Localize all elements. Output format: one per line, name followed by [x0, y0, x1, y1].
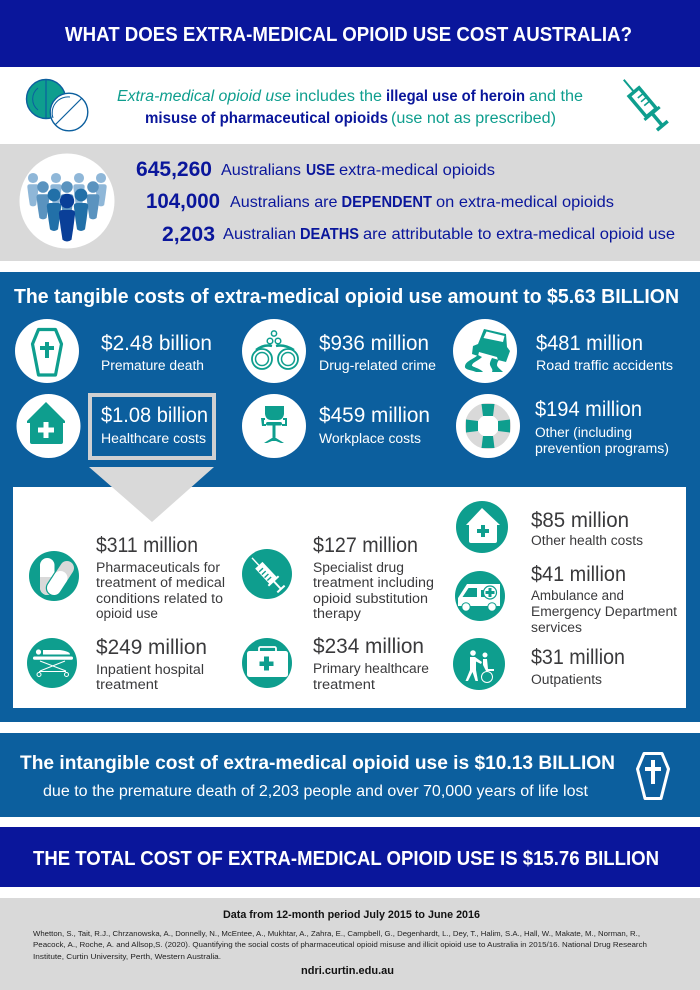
item: pharmaceuticals: opioid use — [96, 606, 158, 621]
citation — [33, 929, 647, 961]
item: primary healthcare: Primary healthcare — [313, 661, 429, 676]
definition text: illegal use of heroin — [386, 88, 525, 105]
item: drug-related crime: Drug-related crime — [319, 358, 436, 373]
stat: users: 645,260 — [136, 158, 212, 181]
website: ndri.curtin.edu.au — [301, 965, 394, 977]
definition text: (use not as prescribed) — [391, 110, 556, 127]
stat: dependent: 104,000 — [146, 190, 220, 213]
item: outpatients — [453, 638, 625, 690]
item: outpatients: $31 million — [531, 646, 625, 669]
item: workplace costs: Workplace costs — [319, 431, 421, 446]
item: inpatient hospital treatment: $249 million — [96, 636, 207, 659]
stat: dependent — [146, 190, 614, 213]
arrow: healthcare to breakdown — [89, 467, 214, 522]
item: premature death — [15, 319, 212, 383]
item: specialist drug treatment: treatment including — [313, 575, 434, 590]
icon: group of people — [20, 154, 114, 248]
item: other health costs — [456, 501, 643, 553]
item: inpatient hospital treatment: Inpatient hospital — [96, 662, 204, 677]
item: ambulance and emergency: Emergency Department — [531, 604, 677, 619]
stat: users: extra-medical opioids — [339, 162, 495, 179]
stat: users: USE — [306, 162, 335, 179]
item: pharmaceuticals: $311 million — [96, 534, 198, 557]
item: road traffic accidents: $481 million — [536, 332, 643, 355]
definition panel — [0, 67, 700, 144]
item: ambulance and emergency: services — [531, 620, 582, 635]
icon: syringe — [616, 73, 670, 132]
item: other health costs: $85 million — [531, 509, 629, 532]
item: pharmaceuticals: conditions related to — [96, 591, 223, 606]
footer: sources — [0, 898, 700, 990]
panel: tangible costs — [0, 272, 700, 722]
item: other costs: Other (including — [535, 425, 632, 440]
item: healthcare costs: $1.08 billion — [101, 404, 208, 427]
item: road traffic accidents — [453, 319, 673, 383]
panel: intangible cost — [0, 733, 700, 817]
item: inpatient hospital treatment — [27, 636, 207, 692]
item: other costs: prevention programs) — [535, 441, 669, 456]
item: specialist drug treatment: opioid substitution — [313, 591, 428, 606]
data period: Data from 12-month period July 2015 to June 2016 — [223, 909, 480, 921]
definition text: and the — [529, 88, 583, 105]
definition text: Extra-medical opioid use — [117, 88, 291, 105]
item: healthcare costs — [16, 394, 214, 458]
stat: users: Australians — [221, 162, 301, 179]
panel: intangible cost: The intangible cost of extra-medical opioid use is $10.13 BILLION — [20, 752, 615, 774]
stat: deaths — [162, 223, 675, 246]
title banner — [0, 0, 700, 67]
citation: Peacock, A., Roche, A. and Allsop,S. (2020). Quantifying the social costs of pharmaceutical opioid misuse and illicit opioid use to Australia in 2015/16. National Drug Research — [33, 940, 647, 949]
tangible costs heading: The tangible costs of extra-medical opioid use amount to $5.63 BILLION — [14, 286, 679, 308]
icon: coffin — [638, 754, 668, 798]
item: primary healthcare: treatment — [313, 677, 375, 692]
stat: deaths: 2,203 — [162, 223, 215, 246]
total cost banner — [0, 827, 700, 887]
item: specialist drug treatment: therapy — [313, 606, 361, 621]
item: drug-related crime: $936 million — [319, 332, 429, 355]
item: workplace costs: $459 million — [319, 404, 430, 427]
definition text — [117, 88, 583, 127]
item: inpatient hospital treatment: treatment — [96, 677, 158, 692]
panel: intangible cost: due to the premature death of 2,203 people and over 70,000 years of life lost — [43, 783, 589, 800]
item: healthcare costs: Healthcare costs — [101, 431, 206, 446]
panel: healthcare cost breakdown — [13, 467, 686, 708]
item: specialist drug treatment: $127 million — [313, 534, 418, 557]
item: specialist drug treatment — [242, 534, 434, 621]
item: other health costs: Other health costs — [531, 533, 643, 548]
item: pharmaceuticals — [29, 534, 225, 621]
item: ambulance and emergency: Ambulance and — [531, 588, 624, 603]
stat: dependent: DEPENDENT — [342, 194, 432, 211]
item: premature death: Premature death — [101, 358, 204, 373]
title banner: WHAT DOES EXTRA-MEDICAL OPIOID USE COST AUSTRALIA? — [65, 24, 632, 46]
item: ambulance and emergency: $41 million — [531, 563, 626, 586]
stat: dependent: Australians are — [230, 194, 338, 211]
definition text: misuse of pharmaceutical opioids — [145, 110, 388, 127]
citation: Whetton, S., Tait, R.J., Chrzanowska, A., Donnelly, N., McEntee, A., Mukhtar, A., Zahra, E., Campbell, G., Degenhardt, L., Dey, T., Halim, S.A., Hall, W., Makate, M., Norman, R., — [33, 929, 640, 938]
item: outpatients: Outpatients — [531, 672, 602, 687]
stat: deaths: Australian — [223, 226, 296, 243]
citation: Institute, Curtin University, Perth, Western Australia. — [33, 952, 221, 961]
stat: dependent: on extra-medical opioids — [436, 194, 614, 211]
item: other costs — [456, 394, 669, 458]
item: ambulance and emergency — [455, 563, 677, 635]
item: specialist drug treatment: Specialist drug — [313, 560, 404, 575]
item: drug-related crime — [242, 319, 436, 383]
item: pharmaceuticals: treatment of medical — [96, 575, 225, 590]
stat: deaths: are attributable to extra-medical opioid use — [363, 226, 675, 243]
item: pharmaceuticals: Pharmaceuticals for — [96, 560, 221, 575]
panel: prevalence statistics — [0, 144, 700, 261]
stat: users — [136, 158, 495, 181]
item: road traffic accidents: Road traffic accidents — [536, 358, 673, 373]
total cost banner: THE TOTAL COST OF EXTRA-MEDICAL OPIOID USE IS $15.76 BILLION — [33, 848, 659, 870]
item: workplace costs — [242, 394, 430, 458]
item: other costs: $194 million — [535, 398, 642, 421]
item: premature death: $2.48 billion — [101, 332, 212, 355]
stat: deaths: DEATHS — [300, 226, 359, 243]
item: primary healthcare: $234 million — [313, 635, 424, 658]
icon: pills — [26, 80, 88, 131]
item: primary healthcare — [242, 635, 429, 692]
definition text: includes the — [296, 88, 382, 105]
